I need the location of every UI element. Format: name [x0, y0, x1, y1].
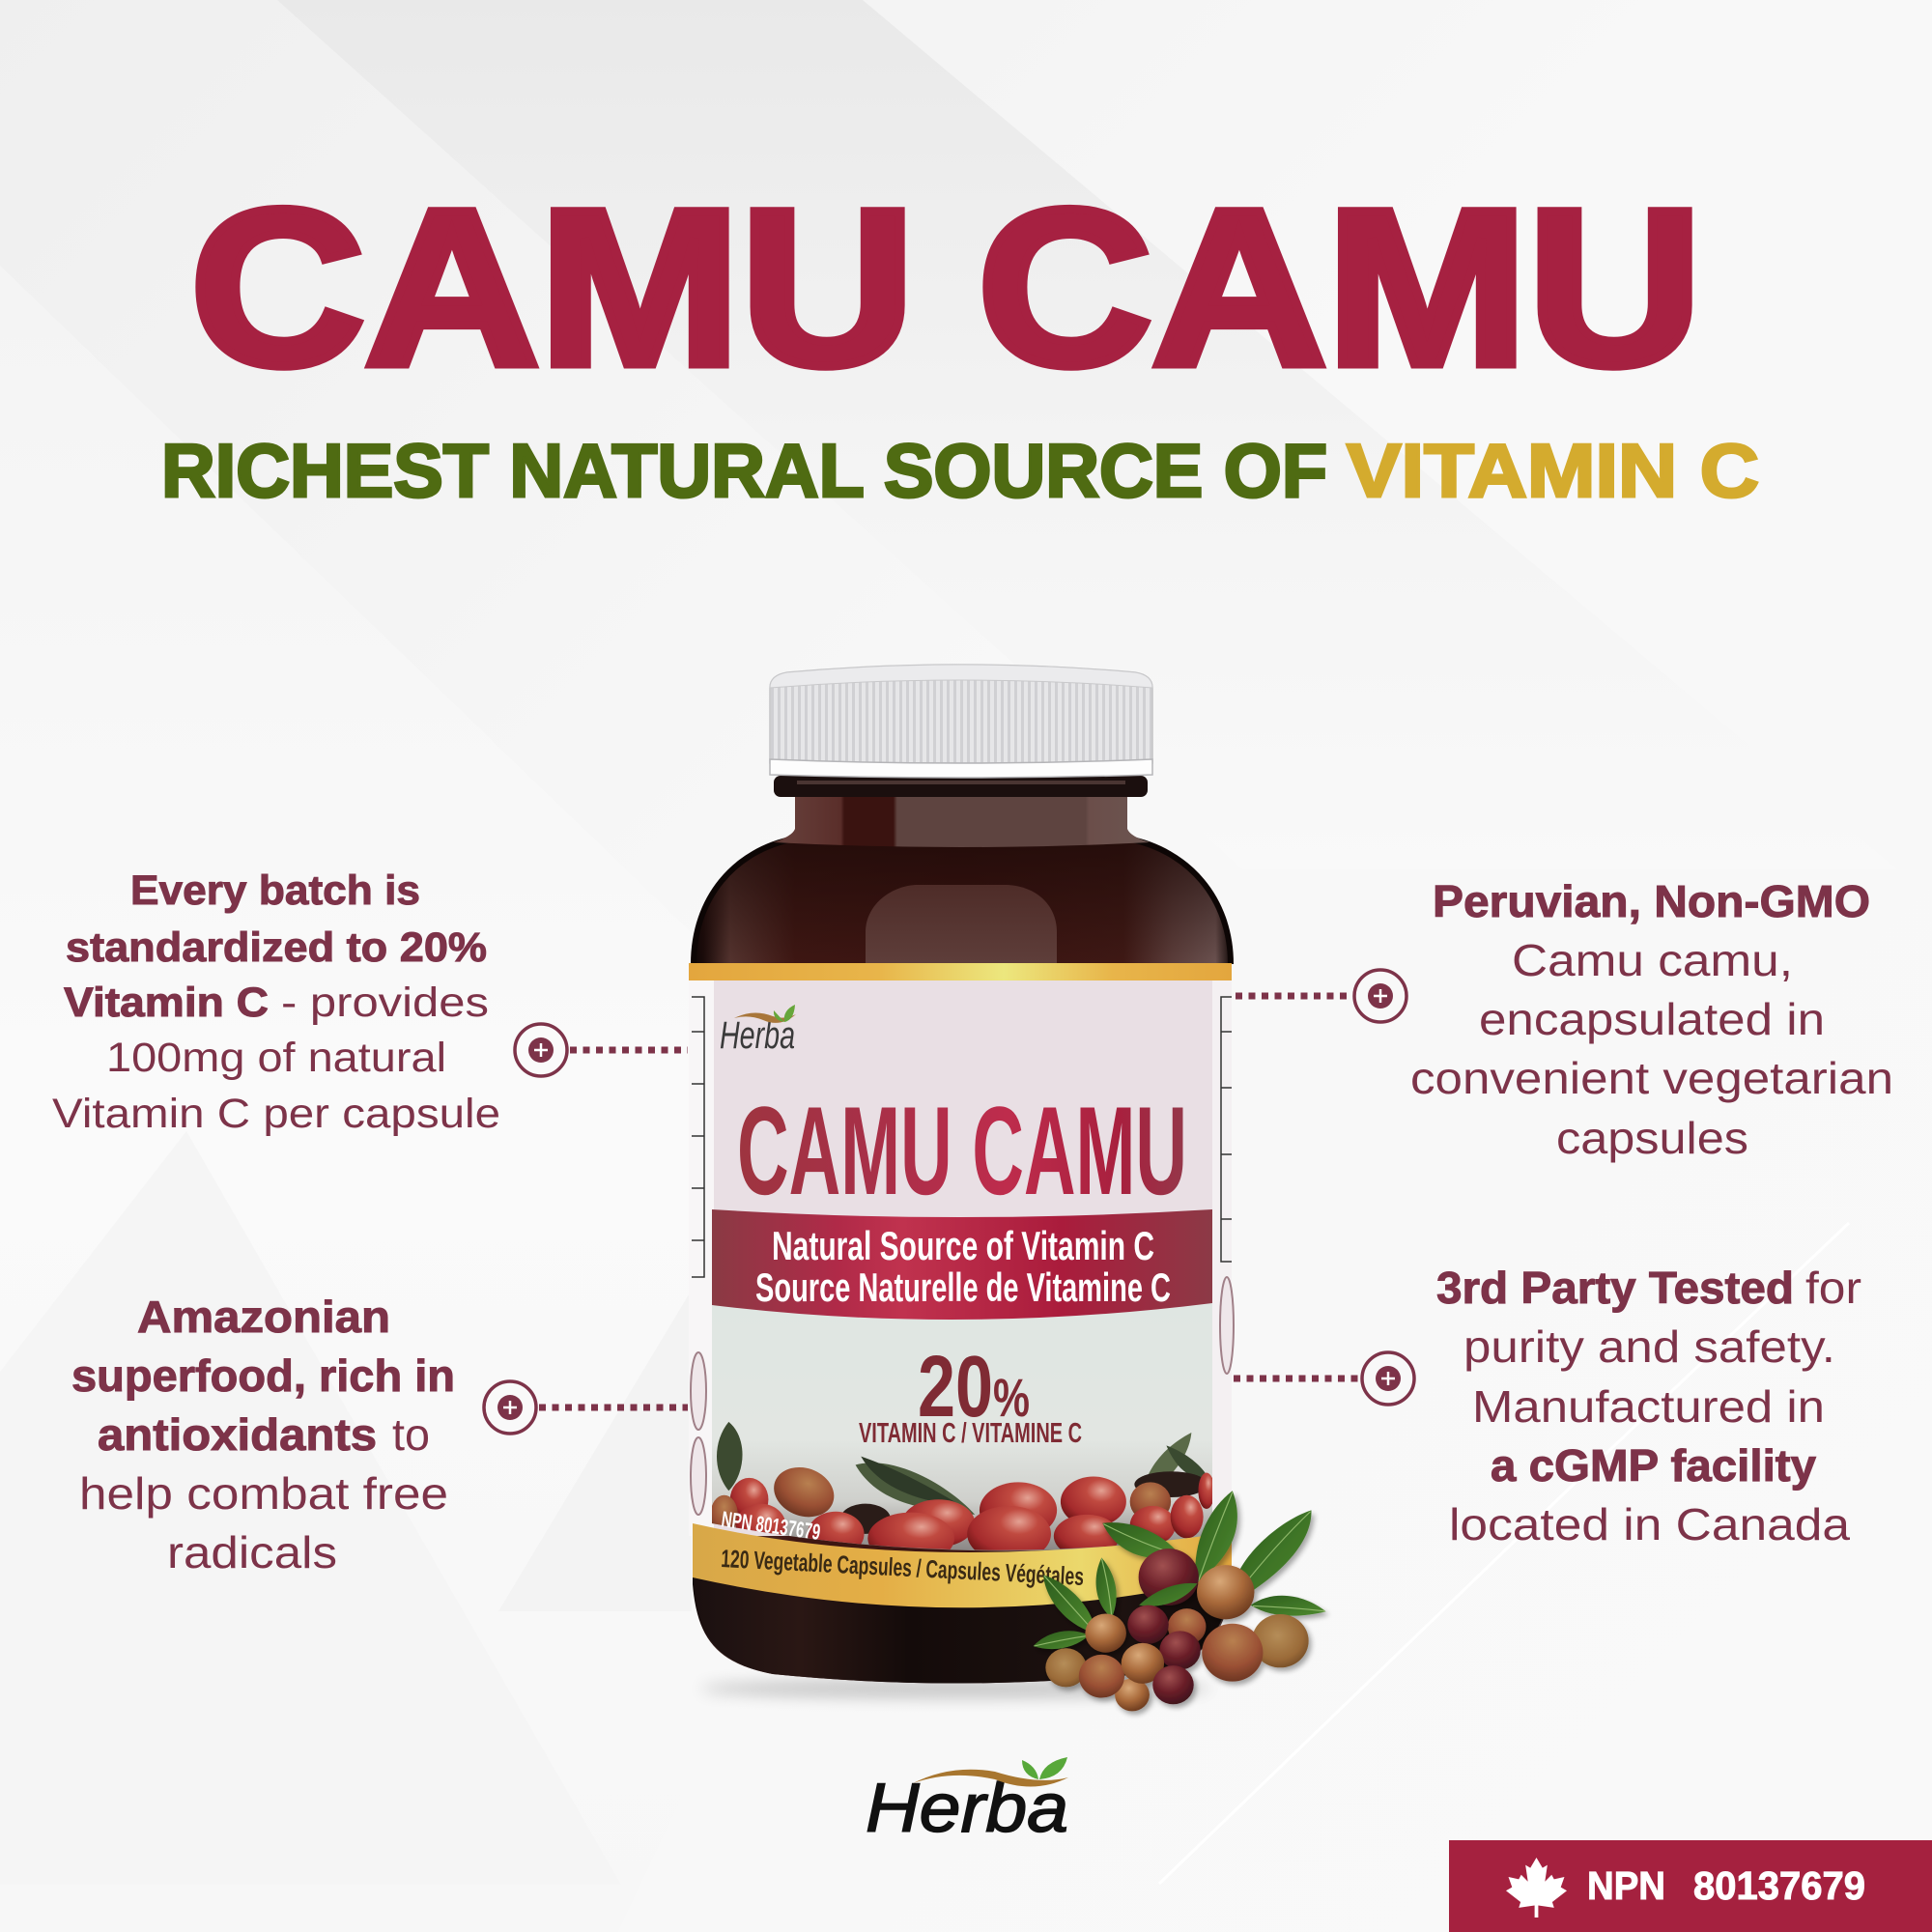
- callout: standardized: Vitamin C per capsule: [52, 1091, 500, 1137]
- bottle base: [693, 1575, 1232, 1683]
- glass highlight: [866, 885, 1057, 963]
- marker: right top: [1236, 970, 1406, 1022]
- label title: CAMU CAMU: [737, 1080, 1187, 1221]
- callout: standardized: Every batch is: [130, 867, 420, 914]
- callout: Amazonian: Amazonian: [137, 1292, 390, 1342]
- red band: [712, 1209, 1212, 1320]
- logo leaves: [1022, 1757, 1067, 1779]
- callout: Amazonian: to: [392, 1409, 430, 1460]
- label subtitle: Natural Source of Vitamin C: [772, 1223, 1154, 1268]
- shoulder rim: [694, 838, 1231, 964]
- side seals: [691, 1277, 1234, 1515]
- label subtitle: Source Naturelle de Vitamine C: [755, 1264, 1171, 1310]
- title: CAMU CAMU: CAMU: [190, 163, 915, 412]
- callout: Peruvian: encapsulated in: [1479, 994, 1825, 1044]
- callout: Peruvian: [1410, 876, 1893, 1163]
- small Herba logo: [720, 1005, 796, 1057]
- NPN on label: NPN 80137679: [720, 1506, 822, 1545]
- sage area: [712, 1303, 1212, 1550]
- collar: [774, 776, 1148, 797]
- icon: maple leaf: [1506, 1858, 1567, 1918]
- NPN text: [1587, 1863, 1865, 1908]
- callout: standardized: - provides: [281, 980, 489, 1026]
- subtitle: RICHEST NATURAL SOURCE OF: [161, 428, 1327, 513]
- 20 percent: VITAMIN C / VITAMINE C: [859, 1418, 1082, 1449]
- marker: left top: [515, 1024, 688, 1076]
- callout: Amazonian: superfood, rich in: [71, 1350, 455, 1401]
- callout: standardized: 100mg of natural: [106, 1035, 446, 1081]
- small Herba logo: Herba: [720, 1014, 795, 1057]
- camu camu fruit cluster: [1034, 1491, 1326, 1711]
- NPN text: 80137679: [1693, 1863, 1865, 1908]
- callout: 3rd party tested: purity and safety.: [1463, 1321, 1835, 1372]
- callout: 3rd party tested: located in Canada: [1449, 1499, 1850, 1549]
- callout: Amazonian: antioxidants: [98, 1409, 377, 1460]
- title: CAMU CAMU: CAMU: [978, 163, 1702, 412]
- marker: right bottom: [1234, 1352, 1414, 1405]
- bottle glass body: [693, 838, 1232, 1683]
- callout: Peruvian: Camu camu,: [1512, 935, 1793, 985]
- side panel lines: [692, 997, 1232, 1277]
- product bottle: [689, 665, 1234, 1698]
- logo swoosh: [913, 1770, 1068, 1787]
- callout: 3rd party tested: a cGMP facility: [1491, 1440, 1816, 1491]
- callout: Amazonian: [71, 1292, 455, 1577]
- callout: Amazonian: help combat free: [79, 1468, 448, 1519]
- capsule count: 120 Vegetable Capsules / Capsules Végétales: [721, 1544, 1085, 1591]
- callout: 3rd party tested: [1436, 1263, 1861, 1549]
- cap: [770, 665, 1152, 778]
- gold bottom band: [693, 1523, 1232, 1607]
- label pink area: [689, 980, 1232, 1536]
- 20 percent: 20: [918, 1339, 993, 1435]
- callout: Peruvian: convenient vegetarian: [1410, 1053, 1893, 1103]
- callout: 3rd party tested: Manufactured in: [1472, 1381, 1825, 1432]
- label subtitle: [755, 1223, 1171, 1310]
- callout: 3rd party tested: 3rd Party Tested: [1436, 1263, 1794, 1313]
- marker: left bottom: [484, 1381, 688, 1434]
- 20 percent: %: [993, 1367, 1030, 1428]
- label fruits: [712, 1422, 1212, 1550]
- callout: Amazonian: radicals: [167, 1527, 337, 1577]
- callout: Peruvian: Peruvian, Non-GMO: [1433, 876, 1870, 926]
- callout: standardized: Vitamin C: [64, 980, 269, 1026]
- 20 percent: [859, 1339, 1082, 1449]
- callout: 3rd party tested: for: [1805, 1263, 1861, 1313]
- callout: Peruvian: capsules: [1556, 1113, 1748, 1163]
- subtitle: VITAMIN C: [1347, 428, 1759, 513]
- title: CAMU CAMU: [190, 163, 1702, 412]
- callout: standardized: [52, 867, 500, 1137]
- bottle neck: [773, 792, 1150, 847]
- NPN text: NPN: [1587, 1863, 1665, 1908]
- label: [689, 963, 1234, 1607]
- Herba logo: Herba: [866, 1771, 1068, 1847]
- gold top band: [689, 963, 1232, 980]
- shoulder shading: [693, 838, 1232, 966]
- callout: standardized: standardized to 20%: [66, 924, 487, 971]
- NPN badge: [1449, 1840, 1932, 1932]
